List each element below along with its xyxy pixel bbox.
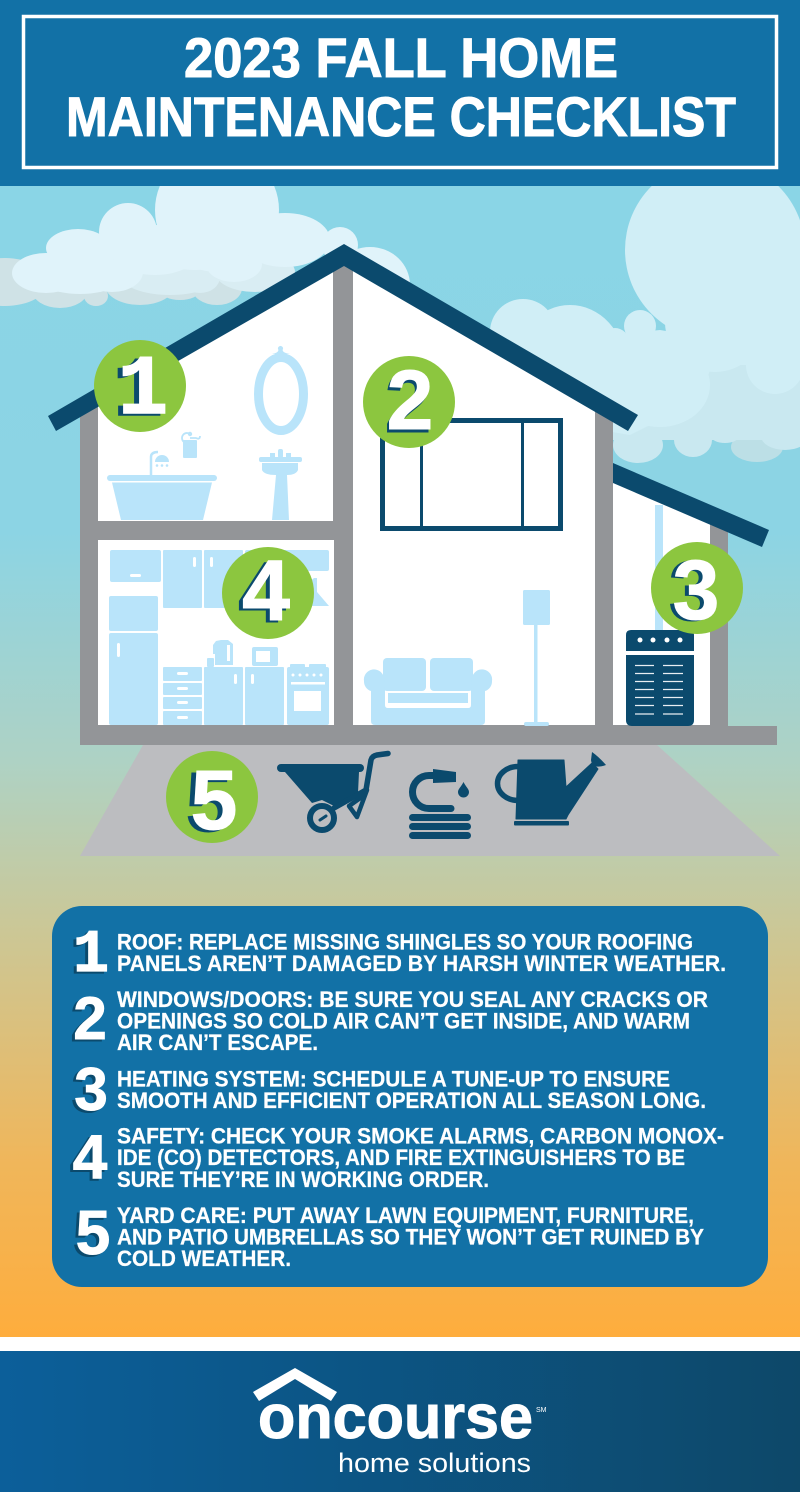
room: utility bbox=[613, 475, 710, 725]
item 1: 1 bbox=[70, 924, 106, 992]
logo tagline: home solutions bbox=[338, 1448, 531, 1478]
badge 3: 3 bbox=[669, 544, 715, 638]
item 1 bbox=[70, 922, 726, 992]
item 3 bbox=[71, 1056, 706, 1125]
badge 4: 4 bbox=[238, 545, 286, 641]
clouds: right bbox=[490, 160, 800, 463]
icon: wheelbarrow bbox=[277, 754, 388, 830]
icon: furnace pipe bbox=[655, 505, 663, 631]
main roof bbox=[48, 244, 638, 431]
item 5: 5 bbox=[76, 1199, 110, 1268]
badge 3: 3 bbox=[673, 543, 719, 637]
item 4 bbox=[70, 1123, 724, 1194]
badge 5: 5 bbox=[191, 753, 237, 847]
item 3: HEATING SYSTEM: SCHEDULE A TUNE-UP TO ENSURE bbox=[117, 1066, 670, 1092]
badge 5 bbox=[166, 751, 258, 849]
house walls bbox=[80, 262, 777, 745]
badge 3 bbox=[651, 542, 743, 638]
title: 2023 FALL HOME bbox=[184, 26, 618, 89]
item 5: YARD CARE: PUT AWAY LAWN EQUIPMENT, FURNITURE, bbox=[117, 1203, 694, 1228]
item 5: 5 bbox=[73, 1201, 107, 1270]
item 1: ROOF: REPLACE MISSING SHINGLES SO YOUR ROOFING bbox=[117, 930, 693, 954]
room: attic bathroom bbox=[98, 262, 333, 521]
item 5: AND PATIO UMBRELLAS SO THEY WON’T GET RUINED BY bbox=[117, 1224, 704, 1250]
item 2: AIR CAN’T ESCAPE. bbox=[117, 1030, 318, 1055]
badge 1: 1 bbox=[113, 346, 163, 441]
icon: sink bbox=[259, 449, 302, 520]
badge 2: 2 bbox=[385, 356, 431, 450]
side roof bbox=[613, 463, 769, 547]
icon: window bbox=[382, 420, 560, 528]
item 5 bbox=[73, 1199, 704, 1271]
icon: couch bbox=[364, 658, 492, 725]
room: living room bbox=[353, 262, 595, 725]
clouds: left bbox=[0, 148, 410, 323]
icon: floor lamp bbox=[523, 590, 550, 726]
badge 1 bbox=[94, 340, 186, 441]
item 2: OPENINGS SO COLD AIR CAN’T GET INSIDE, AND WARM bbox=[117, 1008, 690, 1034]
title: MAINTENANCE CHECKLIST bbox=[66, 85, 736, 148]
title bbox=[66, 26, 736, 148]
badge 2 bbox=[363, 353, 455, 450]
badge 5: 5 bbox=[186, 755, 232, 849]
item 4: SAFETY: CHECK YOUR SMOKE ALARMS, CARBON MONOX- bbox=[117, 1124, 724, 1148]
badge 4 bbox=[222, 543, 314, 641]
item 1: PANELS AREN’T DAMAGED BY HARSH WINTER WEATHER. bbox=[117, 951, 726, 976]
item 4: SURE THEY’RE IN WORKING ORDER. bbox=[117, 1167, 489, 1192]
badge 2: 2 bbox=[387, 353, 433, 447]
item 4: 4 bbox=[70, 1125, 105, 1194]
logo service mark: SM bbox=[536, 1407, 547, 1414]
icon: bathtub bbox=[107, 452, 217, 520]
item 2: WINDOWS/DOORS: BE SURE YOU SEAL ANY CRACKS OR bbox=[117, 987, 708, 1012]
logo wordmark: oncourse bbox=[258, 1383, 533, 1452]
checklist panel bbox=[52, 906, 768, 1287]
item 4: IDE (CO) DETECTORS, AND FIRE EXTINGUISHERS TO BE bbox=[117, 1145, 685, 1170]
icon: watering can bbox=[497, 752, 606, 826]
icon: furnace bbox=[626, 630, 694, 726]
sky background bbox=[0, 186, 800, 1337]
item 1: 1 bbox=[73, 922, 109, 990]
house bbox=[48, 244, 777, 745]
item 3: SMOOTH AND EFFICIENT OPERATION ALL SEASON LONG. bbox=[117, 1088, 706, 1113]
icon: hose bbox=[409, 769, 471, 839]
item 3: 3 bbox=[71, 1058, 105, 1125]
badge 4: 4 bbox=[242, 543, 290, 639]
item 2: 2 bbox=[73, 985, 107, 1052]
logo roof bbox=[253, 1368, 337, 1401]
icon: towel bbox=[182, 432, 200, 458]
icon: kitchen bbox=[109, 550, 329, 725]
footer bbox=[0, 1351, 800, 1492]
item 2 bbox=[70, 985, 708, 1055]
badge 1: 1 bbox=[118, 344, 168, 439]
white strip bbox=[0, 1337, 800, 1351]
ground / yard bbox=[80, 745, 780, 856]
item 2: 2 bbox=[70, 987, 104, 1054]
icon: mirror bbox=[258, 346, 304, 430]
header banner bbox=[0, 0, 800, 186]
item 4: 4 bbox=[73, 1123, 108, 1192]
item 3: 3 bbox=[74, 1056, 108, 1123]
room: kitchen bbox=[98, 540, 334, 725]
item 5: COLD WEATHER. bbox=[117, 1246, 291, 1271]
